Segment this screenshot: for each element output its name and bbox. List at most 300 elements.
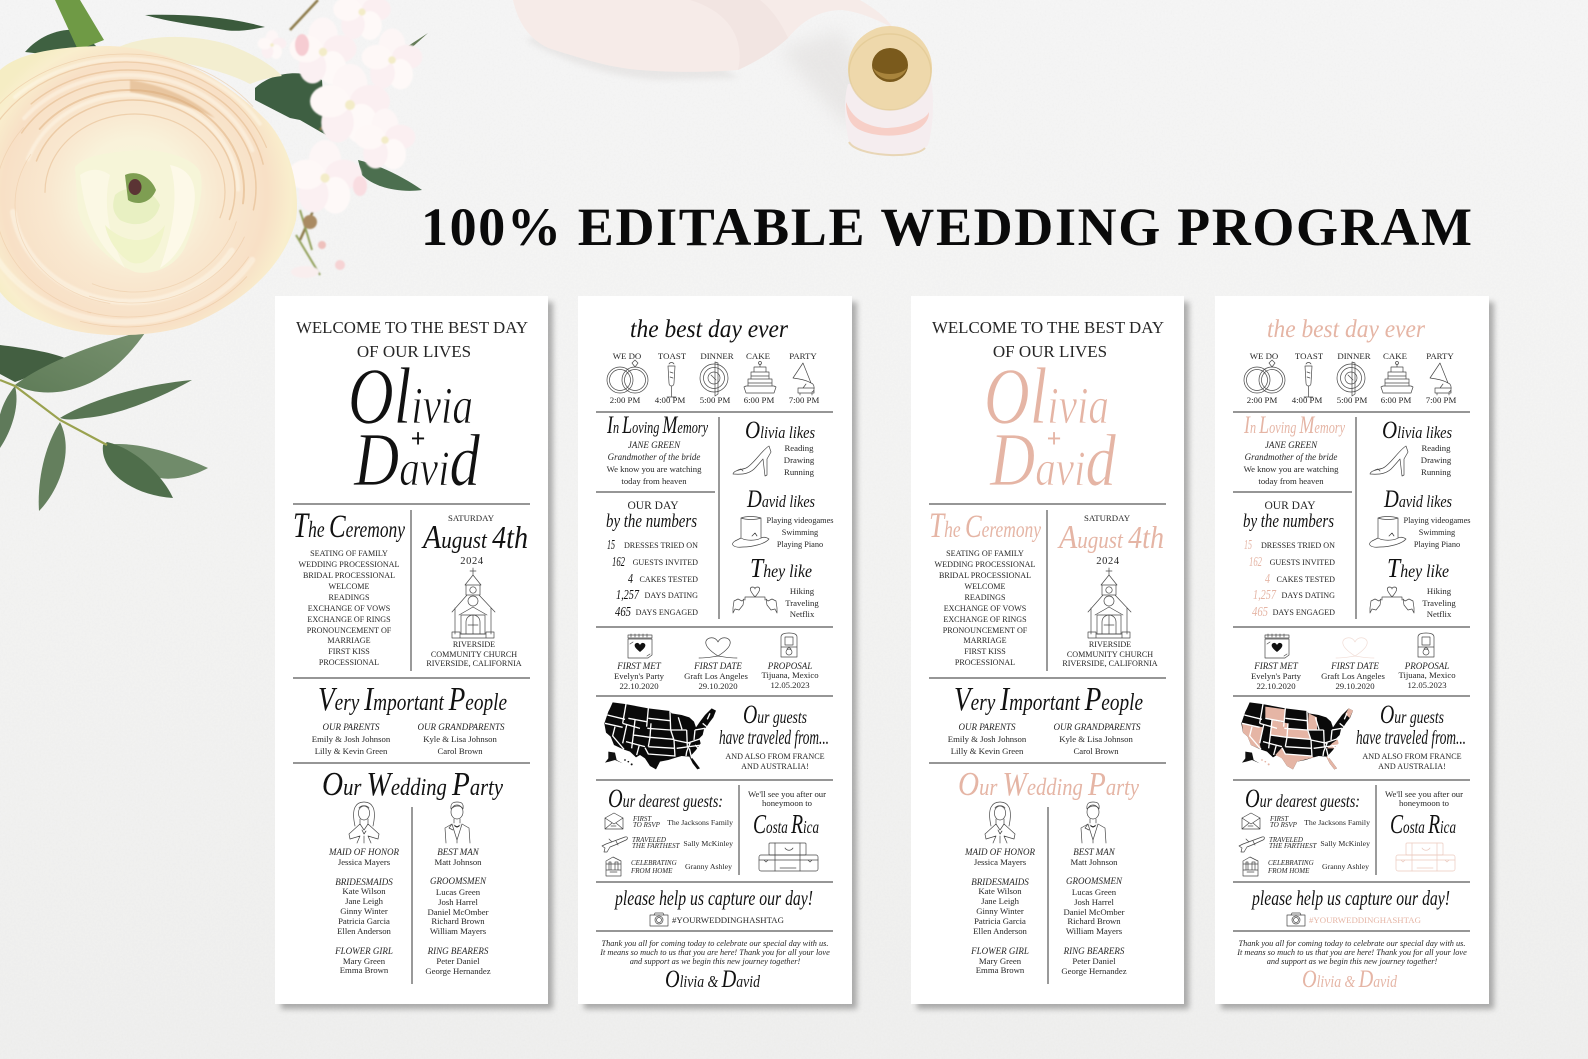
couple names: + [1047, 424, 1061, 453]
guests traveled text: Our guests [743, 700, 807, 729]
panel: card 1 welcome and ceremony program [275, 296, 553, 1009]
our day by the numbers: CAKES TESTED [639, 575, 698, 584]
our day by the numbers: GUESTS INVITED [633, 558, 698, 567]
our day by the numbers: OUR DAY [627, 500, 679, 512]
couple names [348, 353, 481, 502]
welcome heading [932, 318, 1164, 361]
our day by the numbers: OUR DAY [1264, 500, 1316, 512]
very important people [948, 681, 1143, 756]
dearest guests: Sally McKinley [1320, 839, 1370, 848]
ceremony order: EXCHANGE OF RINGS [943, 615, 1027, 624]
very important people: Very Important People [318, 681, 507, 718]
olivia likes: Reading [785, 443, 814, 453]
capture our day [614, 886, 813, 926]
date block: SATURDAY [448, 513, 495, 523]
groom side list: Matt Johnson [1070, 857, 1118, 867]
bride side list: Emma Brown [976, 965, 1025, 975]
ceremony order: FIRST KISS [964, 647, 1006, 656]
bride side list [328, 847, 399, 975]
icon: groom [445, 802, 470, 843]
ranunculus flower [0, 37, 297, 335]
schedule: 4:00 PM [655, 395, 685, 405]
ceremony order: PROCESSIONAL [955, 658, 1015, 667]
couple names: Olivia [348, 353, 473, 441]
dearest guests: TO RSVP [633, 821, 661, 829]
schedule [1244, 351, 1456, 405]
dearest guests: The Jacksons Family [1304, 818, 1370, 827]
in loving memory: JANE GREEN [1265, 440, 1318, 450]
david likes: Playing Piano [1414, 540, 1460, 549]
very important people: Kyle & Lisa Johnson [1059, 734, 1133, 744]
olivia likes: Olivia likes [1382, 417, 1452, 444]
honeymoon: Costa Rica [1390, 809, 1456, 839]
dearest guests: Our dearest guests: [1245, 784, 1360, 813]
our day by the numbers: DRESSES TRIED ON [624, 541, 698, 550]
bride side list: Jessica Mayers [338, 857, 391, 867]
milestones: Tijuana, Mexico [1398, 670, 1456, 680]
bride side list: Kate Wilson [342, 886, 386, 896]
couple names: David [353, 418, 481, 502]
in loving memory: We know you are watching [1244, 464, 1339, 474]
in loving memory: Grandmother of the bride [608, 452, 700, 462]
venue [1062, 640, 1158, 668]
in loving memory: In Loving Memory [606, 412, 708, 439]
best day heading: the best day ever [1267, 316, 1425, 343]
ceremony order: WEDDING PROCESSIONAL [935, 560, 1036, 569]
groom side list: Peter Daniel [436, 956, 480, 966]
our day by the numbers: 162 [1249, 555, 1262, 570]
schedule: 6:00 PM [1381, 395, 1411, 405]
date block: 2024 [460, 556, 484, 567]
greenery: top stem and leaves [25, 0, 428, 191]
honeymoon [1385, 789, 1463, 871]
milestones: FIRST DATE [693, 661, 742, 671]
david likes: Playing Piano [777, 540, 823, 549]
schedule: WE DO [1250, 351, 1278, 361]
in loving memory: In Loving Memory [1243, 412, 1345, 439]
david likes: Swimming [1419, 528, 1455, 537]
groom side list [425, 847, 491, 976]
main title: 100% EDITABLE WEDDING PROGRAM [421, 197, 1472, 257]
thank you note: Olivia & David [665, 966, 760, 993]
ceremony order: The Ceremony [929, 505, 1042, 545]
very important people: Emily & Josh Johnson [312, 734, 391, 744]
capture our day: #YOURWEDDINGHASHTAG [1309, 915, 1421, 925]
milestones: PROPOSAL [1404, 661, 1449, 671]
honeymoon: honeymoon to [762, 798, 813, 808]
dearest guests: THE FARTHEST [632, 842, 681, 850]
our day by the numbers: 1,257 [616, 588, 640, 603]
olivia likes: Drawing [784, 455, 815, 465]
very important people: Carol Brown [1073, 746, 1119, 756]
thank you note: Thank you all for coming today to celebrate our special day with us. [602, 939, 828, 948]
schedule: CAKE [1383, 351, 1407, 361]
wedding party heading: Our Wedding Party [958, 766, 1139, 803]
dearest guests: Granny Ashley [685, 862, 732, 871]
they like [733, 553, 819, 619]
our day by the numbers: DAYS ENGAGED [1273, 608, 1335, 617]
dearest guests [1239, 784, 1370, 876]
dearest guests: TO RSVP [1270, 821, 1298, 829]
dearest guests: TRAVELED [1269, 836, 1303, 844]
very important people: Kyle & Lisa Johnson [423, 734, 497, 744]
dearest guests: THE FARTHEST [1269, 842, 1318, 850]
ceremony order: SEATING OF FAMILY [946, 549, 1024, 558]
white pink blossoms [258, 0, 422, 278]
very important people [312, 681, 507, 756]
groom side list: RING BEARERS [427, 946, 489, 956]
milestones: 22.10.2020 [1256, 681, 1296, 691]
ceremony order: READINGS [329, 593, 369, 602]
very important people: Lilly & Kevin Green [315, 746, 388, 756]
milestones: Evelyn's Party [1251, 671, 1302, 681]
welcome heading: OF OUR LIVES [993, 342, 1107, 361]
in loving memory: We know you are watching [607, 464, 702, 474]
dearest guests: Granny Ashley [1322, 862, 1369, 871]
schedule: 4:00 PM [1292, 395, 1322, 405]
david likes [1370, 486, 1471, 549]
very important people: OUR PARENTS [958, 722, 1016, 732]
thank you note: and support as we begin this new journey together! [630, 957, 800, 966]
bride side list: MAID OF HONOR [328, 847, 399, 857]
groom side list: RING BEARERS [1063, 946, 1125, 956]
very important people: Very Important People [954, 681, 1143, 718]
ceremony order: FIRST KISS [328, 647, 370, 656]
milestones: PROPOSAL [767, 661, 812, 671]
guests traveled text: AND AUSTRALIA! [741, 762, 809, 771]
venue: COMMUNITY CHURCH [431, 650, 517, 659]
milestones: 12.05.2023 [1407, 680, 1447, 690]
guests traveled text: AND ALSO FROM FRANCE [1362, 752, 1462, 761]
schedule: TOAST [658, 351, 687, 361]
schedule: 2:00 PM [610, 395, 640, 405]
dearest guests: Our dearest guests: [608, 784, 723, 813]
schedule: 5:00 PM [700, 395, 730, 405]
schedule: DINNER [1337, 351, 1371, 361]
our day by the numbers: 162 [612, 555, 625, 570]
bride side list: Mary Green [979, 956, 1022, 966]
they like: Traveling [1422, 598, 1456, 608]
bride side list: Mary Green [343, 956, 386, 966]
in loving memory: JANE GREEN [628, 440, 681, 450]
groom side list: Lucas Green [1072, 887, 1117, 897]
groom side list: BEST MAN [437, 847, 480, 857]
bride side list: Ellen Anderson [337, 926, 392, 936]
date block: August 4th [1057, 519, 1164, 556]
groom side list: Josh Harrel [1074, 897, 1114, 907]
schedule: 6:00 PM [744, 395, 774, 405]
ceremony order: SEATING OF FAMILY [310, 549, 388, 558]
groom side list: William Mayers [430, 926, 487, 936]
bride side list: Emma Brown [340, 965, 389, 975]
milestones: 29.10.2020 [698, 681, 738, 691]
our day by the numbers: 465 [1252, 605, 1268, 620]
bride side list: Ginny Winter [976, 906, 1024, 916]
couple names: Olivia [984, 353, 1109, 441]
bride side list: Patricia Garcia [338, 916, 390, 926]
olivia likes: Reading [1422, 443, 1451, 453]
thank you note: and support as we begin this new journey together! [1267, 957, 1437, 966]
venue: RIVERSIDE [1089, 640, 1131, 649]
ceremony order: EXCHANGE OF RINGS [307, 615, 391, 624]
guests traveled text: have traveled from... [1356, 727, 1466, 749]
milestones: 29.10.2020 [1335, 681, 1375, 691]
in loving memory: Grandmother of the bride [1245, 452, 1337, 462]
schedule: 7:00 PM [789, 395, 819, 405]
bride side list: BRIDESMAIDS [971, 877, 1029, 887]
date block: SATURDAY [1084, 513, 1131, 523]
groom side list: George Hernandez [1061, 966, 1127, 976]
ceremony order [929, 505, 1042, 667]
us map with blush states [1241, 702, 1353, 769]
guests traveled text: AND AUSTRALIA! [1378, 762, 1446, 771]
groom side list: BEST MAN [1073, 847, 1116, 857]
honeymoon [748, 789, 826, 871]
groom side list: William Mayers [1066, 926, 1123, 936]
olivia likes: Running [784, 467, 815, 477]
bride side list: MAID OF HONOR [964, 847, 1035, 857]
groom side list: Peter Daniel [1072, 956, 1116, 966]
they like: They like [1387, 553, 1449, 583]
groom side list: Lucas Green [436, 887, 481, 897]
dearest guests: FROM HOME [1267, 867, 1310, 875]
dearest guests: CELEBRATING [631, 859, 677, 867]
icon: bride [349, 802, 379, 843]
bride side list: Jane Leigh [345, 896, 384, 906]
groom side list: Josh Harrel [438, 897, 478, 907]
schedule: 7:00 PM [1426, 395, 1456, 405]
ceremony order: PRONOUNCEMENT OF [307, 626, 392, 635]
couple names [984, 353, 1117, 502]
they like: Netflix [790, 609, 815, 619]
bride side list: BRIDESMAIDS [335, 877, 393, 887]
ceremony order: PROCESSIONAL [319, 658, 379, 667]
milestones: 22.10.2020 [619, 681, 659, 691]
our day by the numbers [1243, 500, 1335, 620]
olivia likes [733, 417, 815, 477]
they like: Hiking [790, 586, 815, 596]
ceremony order: WELCOME [965, 582, 1006, 591]
ceremony order: WELCOME [329, 582, 370, 591]
david likes: David likes [1383, 486, 1452, 513]
ribbon spool [845, 26, 933, 156]
very important people: OUR PARENTS [322, 722, 380, 732]
very important people: OUR GRANDPARENTS [1053, 722, 1141, 732]
honeymoon: Costa Rica [753, 809, 819, 839]
ceremony order: MARRIAGE [963, 636, 1007, 645]
date block [421, 513, 528, 567]
our day by the numbers: DRESSES TRIED ON [1261, 541, 1335, 550]
honeymoon: We'll see you after our [1385, 789, 1463, 799]
milestones: Evelyn's Party [614, 671, 665, 681]
guests traveled text [719, 700, 829, 771]
ceremony order: WEDDING PROCESSIONAL [299, 560, 400, 569]
groom side list: George Hernandez [425, 966, 491, 976]
ribbon [513, 0, 893, 130]
dearest guests: The Jacksons Family [667, 818, 733, 827]
olivia likes: Drawing [1421, 455, 1452, 465]
dearest guests: CELEBRATING [1268, 859, 1314, 867]
olivia likes [1370, 417, 1452, 477]
our day by the numbers: DAYS ENGAGED [636, 608, 698, 617]
schedule [607, 351, 819, 405]
our day by the numbers [606, 500, 698, 620]
ceremony order: BRIDAL PROCESSIONAL [939, 571, 1031, 580]
they like: Traveling [785, 598, 819, 608]
guests traveled text: AND ALSO FROM FRANCE [725, 752, 825, 761]
best day heading: the best day ever [630, 316, 788, 343]
milestones: 12.05.2023 [770, 680, 810, 690]
david likes: David likes [746, 486, 815, 513]
they like: Hiking [1427, 586, 1452, 596]
milestones: Tijuana, Mexico [761, 670, 819, 680]
dearest guests: FIRST [1269, 815, 1289, 823]
bride side list [964, 847, 1035, 975]
ceremony order: PRONOUNCEMENT OF [943, 626, 1028, 635]
venue: RIVERSIDE [453, 640, 495, 649]
milestones [1251, 633, 1456, 691]
us map [604, 702, 716, 769]
thank you note: It means so much to us that you are here! Thank you for all your love [1236, 948, 1467, 957]
bride side list: Kate Wilson [978, 886, 1022, 896]
schedule: PARTY [1426, 351, 1454, 361]
david likes: Swimming [782, 528, 818, 537]
welcome heading [296, 318, 528, 361]
dearest guests: FROM HOME [630, 867, 673, 875]
groom side list [1061, 847, 1127, 976]
thank you note: Olivia & David [1302, 966, 1397, 993]
bride side list: FLOWER GIRL [970, 946, 1029, 956]
ceremony order: READINGS [965, 593, 1005, 602]
date block [1057, 513, 1164, 567]
thank you note [1236, 939, 1467, 993]
welcome heading: WELCOME TO THE BEST DAY [932, 318, 1164, 337]
our day by the numbers: 15 [607, 538, 615, 553]
panel: card 2 best day ever [578, 296, 857, 1009]
milestones: Graft Los Angeles [1321, 671, 1385, 681]
dearest guests: TRAVELED [632, 836, 666, 844]
groom side list: Daniel McOmber [427, 907, 489, 917]
very important people: Carol Brown [437, 746, 483, 756]
date block: August 4th [421, 519, 528, 556]
our day by the numbers: 4 [1265, 572, 1270, 587]
venue: COMMUNITY CHURCH [1067, 650, 1153, 659]
very important people: OUR GRANDPARENTS [417, 722, 505, 732]
welcome heading: OF OUR LIVES [357, 342, 471, 361]
ceremony order: MARRIAGE [327, 636, 371, 645]
milestones: Graft Los Angeles [684, 671, 748, 681]
very important people: Emily & Josh Johnson [948, 734, 1027, 744]
groom side list: Matt Johnson [434, 857, 482, 867]
venue [426, 640, 522, 668]
bride side list: Jane Leigh [981, 896, 1020, 906]
in loving memory [606, 412, 708, 486]
our day by the numbers: by the numbers [606, 511, 697, 532]
groom side list: GROOMSMEN [1066, 876, 1123, 886]
couple names: David [989, 418, 1117, 502]
our day by the numbers: GUESTS INVITED [1270, 558, 1335, 567]
schedule: CAKE [746, 351, 770, 361]
guests traveled text: Our guests [1380, 700, 1444, 729]
venue: RIVERSIDE, CALIFORNIA [1062, 659, 1158, 668]
in loving memory: today from heaven [1258, 476, 1324, 486]
capture our day [1251, 886, 1450, 926]
david likes [733, 486, 834, 549]
olivia likes: Olivia likes [745, 417, 815, 444]
our day by the numbers: DAYS DATING [1282, 591, 1335, 600]
welcome heading: WELCOME TO THE BEST DAY [296, 318, 528, 337]
ceremony order: BRIDAL PROCESSIONAL [303, 571, 395, 580]
icon: groom [1081, 802, 1106, 843]
our day by the numbers: 465 [615, 605, 631, 620]
schedule: PARTY [789, 351, 817, 361]
olivia likes: Running [1421, 467, 1452, 477]
capture our day: please help us capture our day! [1251, 886, 1450, 910]
capture our day: #YOURWEDDINGHASHTAG [672, 915, 784, 925]
dearest guests [602, 784, 733, 876]
thank you note [599, 939, 830, 993]
groom side list: Daniel McOmber [1063, 907, 1125, 917]
icon: bride [985, 802, 1015, 843]
bride side list: Ginny Winter [340, 906, 388, 916]
bride side list: FLOWER GIRL [334, 946, 393, 956]
our day by the numbers: 15 [1244, 538, 1252, 553]
in loving memory [1243, 412, 1345, 486]
our day by the numbers: by the numbers [1243, 511, 1334, 532]
ceremony order: EXCHANGE OF VOWS [308, 604, 390, 613]
our day by the numbers: 4 [628, 572, 633, 587]
date block: 2024 [1096, 556, 1120, 567]
our day by the numbers: DAYS DATING [645, 591, 698, 600]
very important people: Lilly & Kevin Green [951, 746, 1024, 756]
david likes: Playing videogames [1403, 516, 1471, 525]
greenery: lower left leaves [0, 330, 208, 511]
they like: They like [750, 553, 812, 583]
ceremony order [293, 505, 406, 667]
guests traveled text [1356, 700, 1466, 771]
wedding party heading: Our Wedding Party [322, 766, 503, 803]
schedule: TOAST [1295, 351, 1324, 361]
milestones: FIRST MET [1253, 661, 1299, 671]
they like [1370, 553, 1456, 619]
ceremony order: The Ceremony [293, 505, 406, 545]
our day by the numbers: 1,257 [1253, 588, 1277, 603]
icon: church [1088, 568, 1131, 638]
panel: card 3 welcome program blush version [911, 296, 1189, 1009]
bride side list: Jessica Mayers [974, 857, 1027, 867]
couple names: + [411, 424, 425, 453]
in loving memory: today from heaven [621, 476, 687, 486]
guests traveled text: have traveled from... [719, 727, 829, 749]
milestones: FIRST DATE [1330, 661, 1379, 671]
milestones [614, 633, 819, 691]
honeymoon: honeymoon to [1399, 798, 1450, 808]
our day by the numbers: CAKES TESTED [1276, 575, 1335, 584]
bride side list: Patricia Garcia [974, 916, 1026, 926]
panel: card 4 best day ever blush version [1215, 296, 1494, 1009]
capture our day: please help us capture our day! [614, 886, 813, 910]
david likes: Playing videogames [766, 516, 834, 525]
groom side list: Richard Brown [1067, 916, 1121, 926]
venue: RIVERSIDE, CALIFORNIA [426, 659, 522, 668]
schedule: DINNER [700, 351, 734, 361]
ceremony order: EXCHANGE OF VOWS [944, 604, 1026, 613]
bride side list: Ellen Anderson [973, 926, 1028, 936]
schedule: 2:00 PM [1247, 395, 1277, 405]
dearest guests: Sally McKinley [683, 839, 733, 848]
dearest guests: FIRST [632, 815, 652, 823]
milestones: FIRST MET [616, 661, 662, 671]
